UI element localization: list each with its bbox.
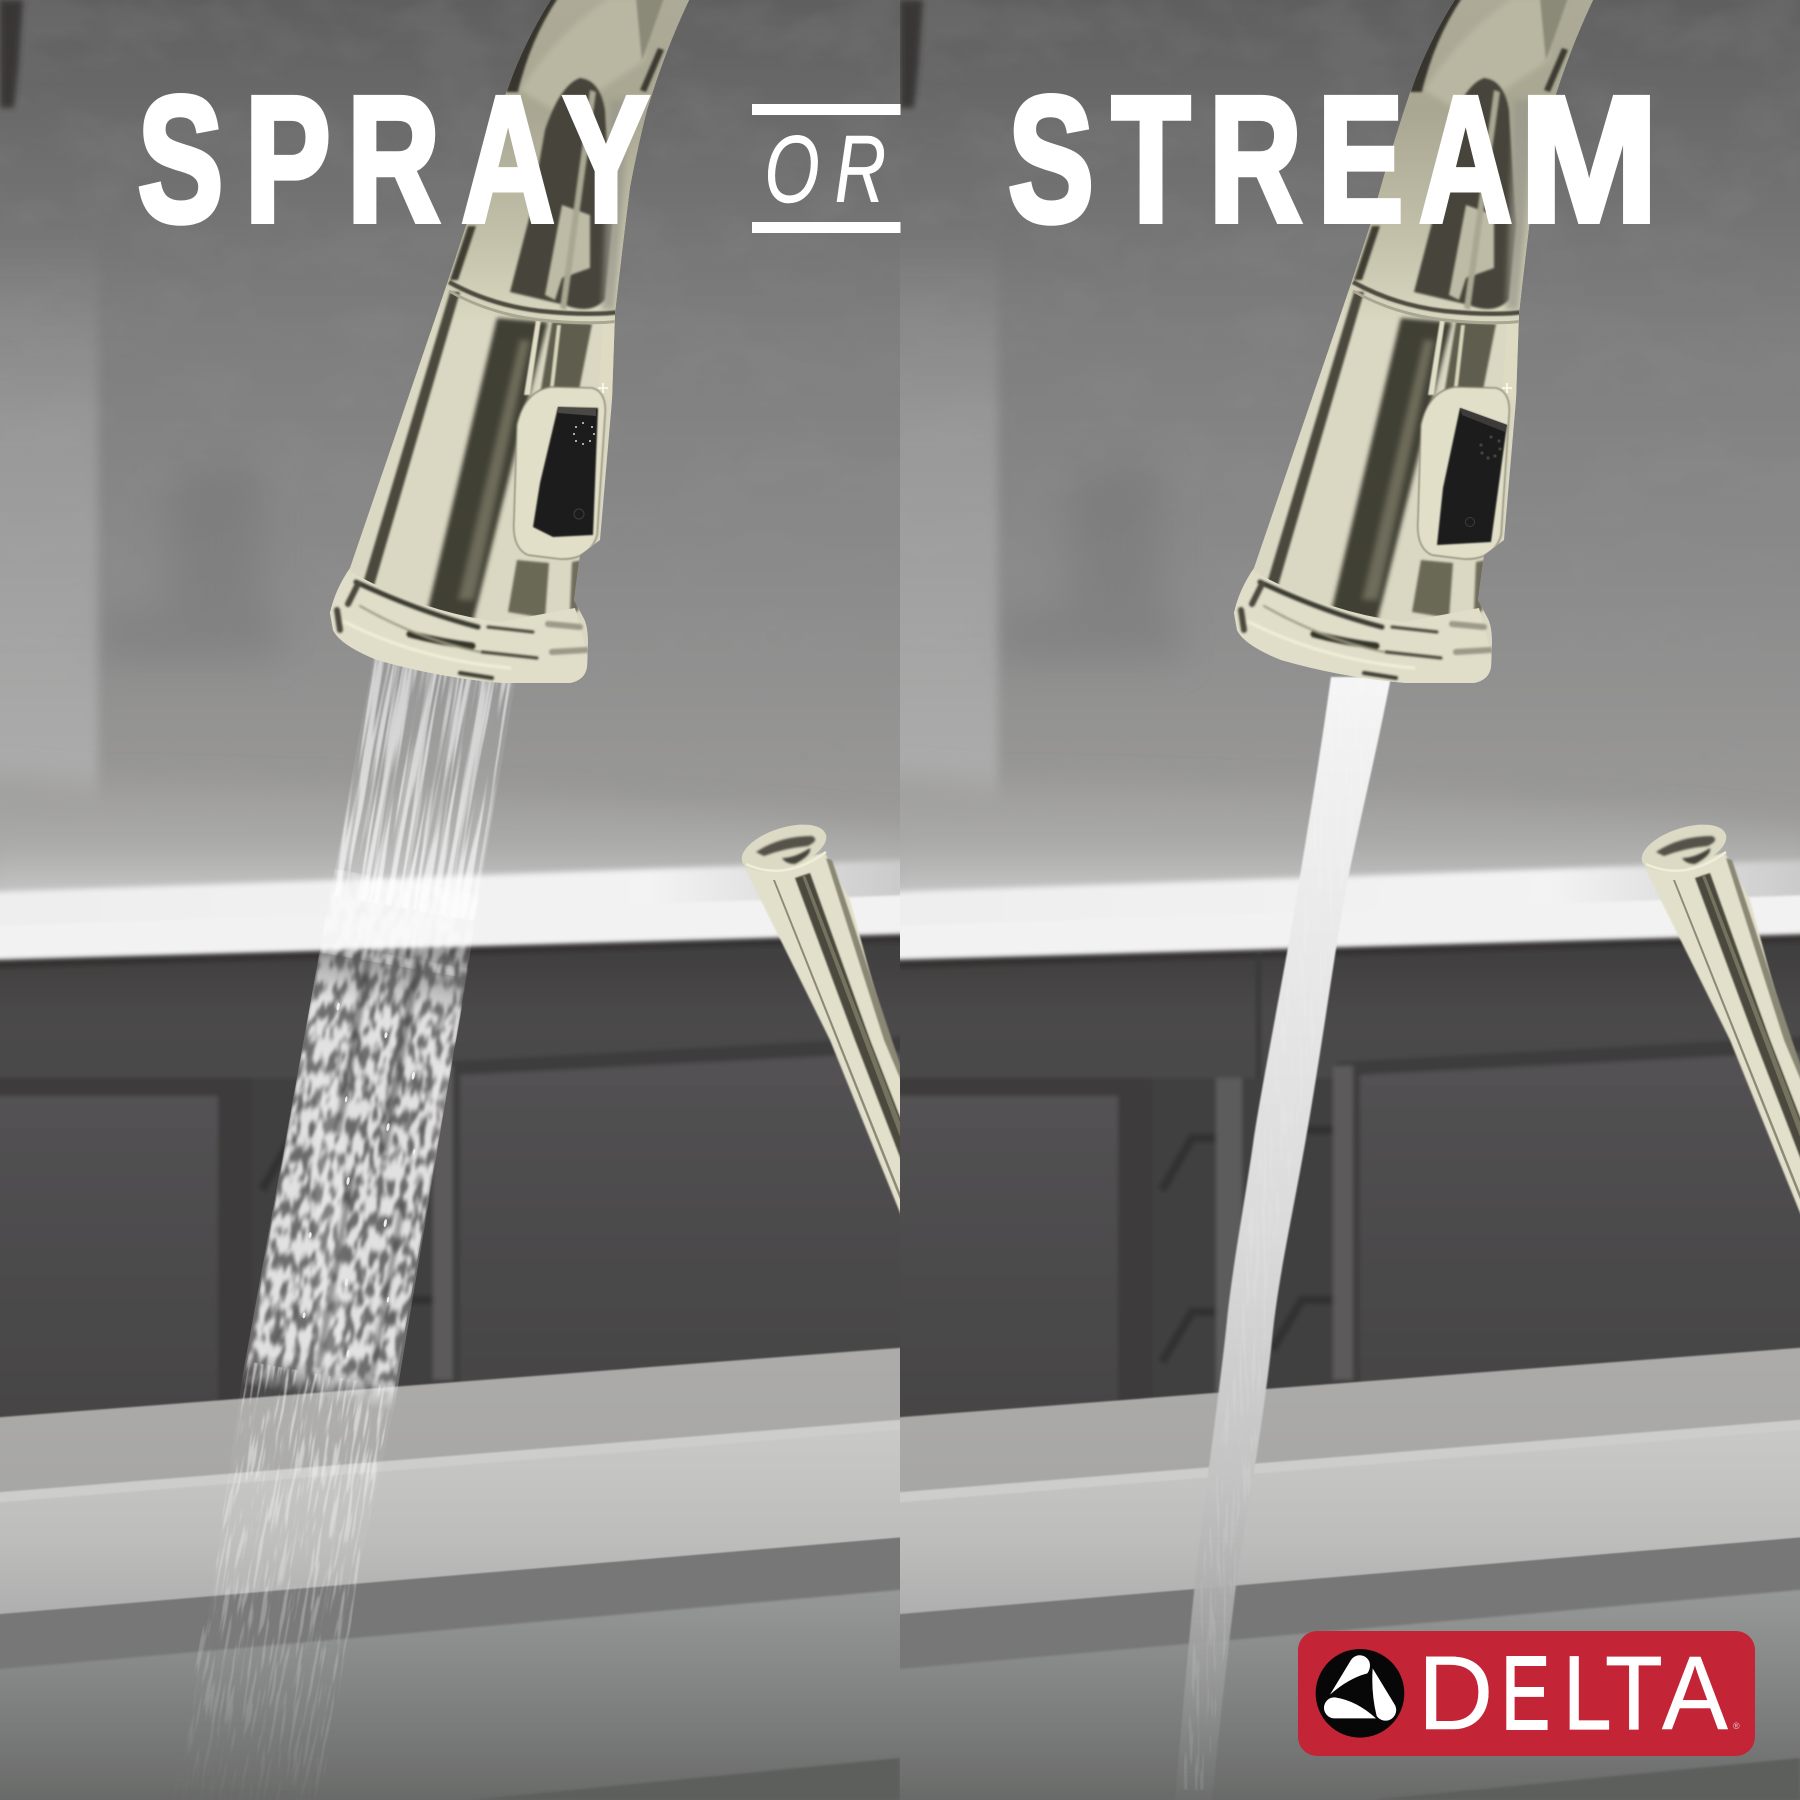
- kitchen background: right: [870, 0, 1800, 1800]
- spray droplets: [243, 943, 469, 1412]
- logo: Delta: [1298, 1631, 1755, 1756]
- spray gap channels: [314, 952, 424, 1380]
- stream button: [1437, 408, 1507, 545]
- lever handle: right: [1636, 815, 1800, 1225]
- solid stream of water: [1175, 677, 1391, 1800]
- logo wordmark: T: [1605, 1635, 1663, 1752]
- button dots: [573, 422, 595, 445]
- logo emblem: [1316, 1649, 1404, 1738]
- logo wordmark: [1418, 1634, 1728, 1752]
- lever handle: left: [742, 824, 900, 1215]
- heading: SPRAY: SPRAY: [138, 60, 649, 260]
- spray lower streaks: [190, 1362, 389, 1778]
- logo wordmark: D: [1418, 1635, 1493, 1752]
- panel: spray: [0, 0, 920, 1800]
- logo wordmark: E: [1501, 1635, 1550, 1752]
- spray highlights: [302, 1002, 416, 1358]
- registered mark: ®: [1733, 1721, 1740, 1731]
- panel: stream: [870, 0, 1800, 1800]
- stream head: right: [1224, 0, 1604, 700]
- spray haze: [240, 722, 503, 1406]
- OR badge: [752, 104, 900, 233]
- stream texture: [1184, 1594, 1225, 1790]
- heading: STREAM: STREA: [1008, 60, 1512, 260]
- spray speckle on counter: [319, 869, 480, 978]
- spray of water: [190, 658, 512, 1778]
- kitchen background: left: [0, 0, 920, 1800]
- logo wordmark: L: [1563, 1635, 1611, 1752]
- button dots: [1479, 435, 1502, 460]
- spray head: left: [320, 0, 700, 700]
- spray streaks upper: [336, 659, 512, 884]
- heading: STREAM: M: [1520, 59, 1658, 259]
- spray button: [533, 407, 598, 537]
- text: OR: OR: [764, 116, 886, 222]
- logo wordmark: A: [1662, 1634, 1728, 1752]
